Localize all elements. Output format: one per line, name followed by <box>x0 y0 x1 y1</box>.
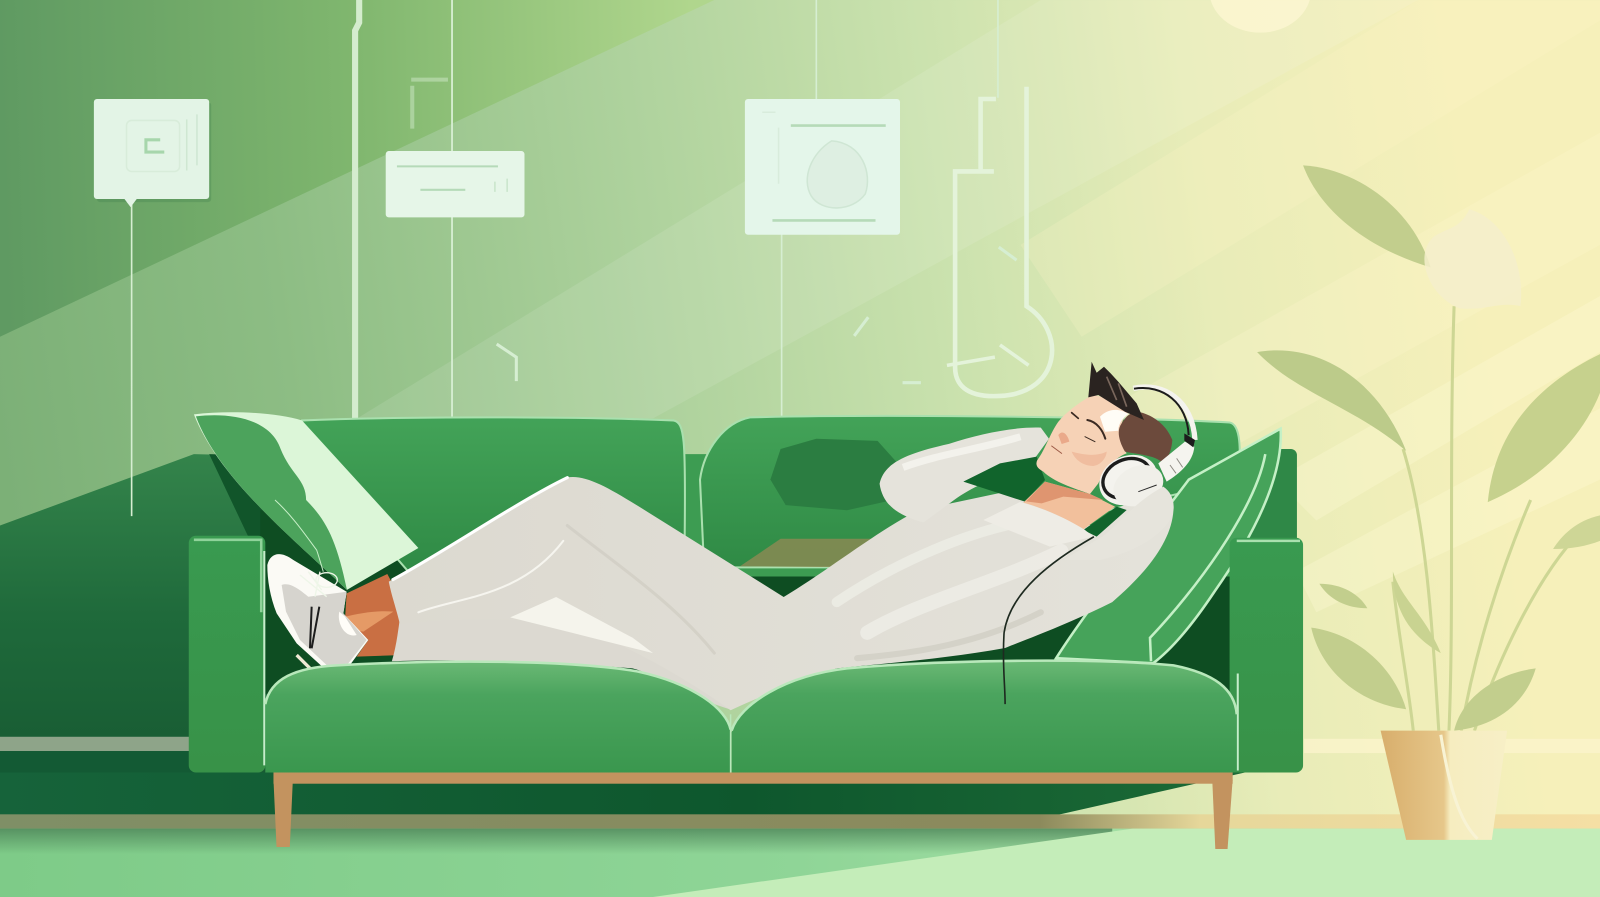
sofa arm: right back panel <box>1240 449 1297 551</box>
headband <box>1133 387 1195 440</box>
dark green shadow under chin <box>963 457 1127 537</box>
hair <box>1119 412 1172 464</box>
eyebrows and closed eye <box>1052 413 1105 453</box>
back cushion: left <box>302 417 685 571</box>
dark lower wall behind sofa <box>0 454 316 814</box>
hanging lines and wall outline glyphs <box>132 0 1015 515</box>
sneaker upper <box>282 584 367 667</box>
wall panel: left <box>94 99 211 207</box>
back leg <box>392 602 730 709</box>
ear cup <box>1091 446 1166 514</box>
earphone cable <box>1003 537 1094 704</box>
pillow edge stitch <box>275 500 323 572</box>
plant pot <box>1381 731 1507 840</box>
wall thermometer outline <box>947 87 1052 396</box>
seat cushion: right <box>732 661 1237 772</box>
sofa <box>189 412 1303 849</box>
sofa arm: left <box>189 536 265 772</box>
sneaker sole <box>267 554 368 671</box>
orange socks <box>345 574 407 657</box>
shirt collar <box>983 502 1093 547</box>
sneaker stripes <box>310 607 319 648</box>
face <box>1036 396 1128 494</box>
pillow: right <box>1056 429 1281 663</box>
back cushion: right <box>700 416 1240 567</box>
headphone arm <box>1158 442 1194 482</box>
cushion shadow patches <box>770 439 903 510</box>
neck <box>1023 482 1115 529</box>
hand behind head <box>1063 487 1173 560</box>
pillow: left <box>194 412 418 590</box>
sneaker laces <box>300 572 337 597</box>
raised arm <box>880 427 1049 522</box>
sofa back base <box>673 454 1296 577</box>
highlight beneath the knee <box>510 597 653 653</box>
clothing highlights and folds <box>393 478 1061 658</box>
sofa arm: right <box>1230 538 1303 772</box>
head with headphones <box>963 362 1195 560</box>
seat cushion: left <box>265 662 731 772</box>
wall panel: middle <box>386 151 524 217</box>
sofa seat crease marks <box>949 663 990 676</box>
sofa seat cushions <box>265 661 1237 772</box>
potted plant <box>1257 165 1600 731</box>
torso and front leg <box>389 477 1174 710</box>
skirting and floor <box>0 739 1600 897</box>
sofa dark interior <box>260 510 1240 694</box>
sofa legs and frame <box>273 772 1233 849</box>
man in white clothes <box>389 427 1174 710</box>
wall panel: right <box>745 99 900 235</box>
foot: sock and sneaker <box>267 500 407 672</box>
